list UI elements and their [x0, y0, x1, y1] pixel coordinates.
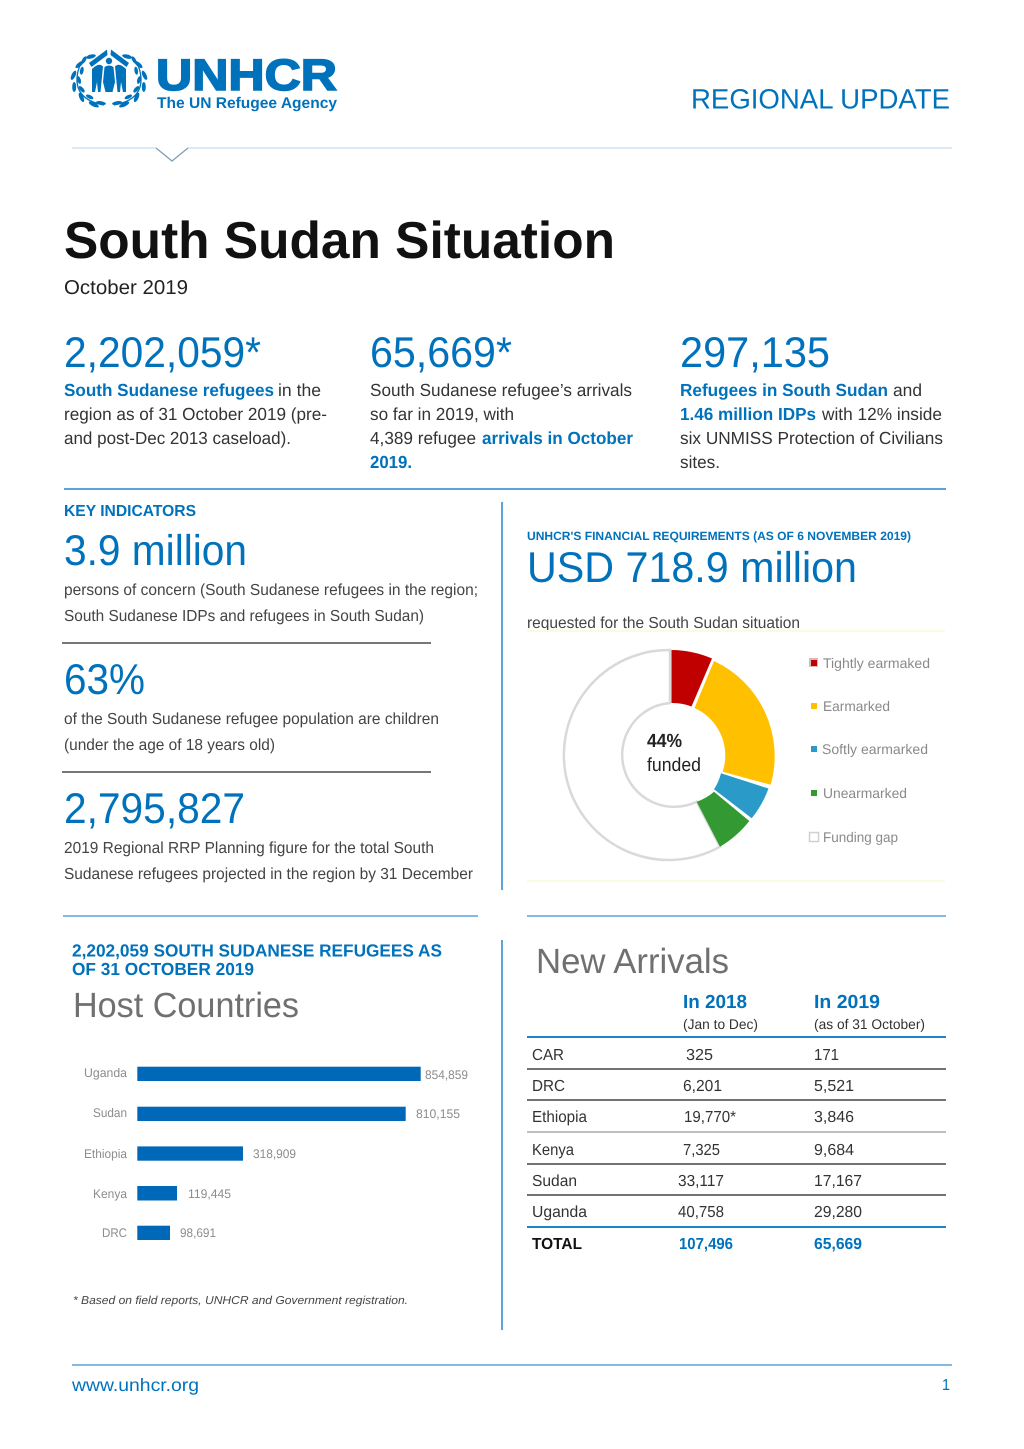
heading: host countries: Host Countries — [73, 986, 299, 1025]
table row: DRC: DRC — [532, 1078, 565, 1095]
chart legend — [809, 655, 930, 845]
bar chart: 318,909 — [253, 1147, 296, 1161]
footer: website: www.unhcr.org — [71, 1375, 199, 1395]
table row: total — [532, 1236, 862, 1253]
panel: financial requirements — [527, 529, 945, 881]
table row: total: 65,669 — [814, 1236, 862, 1253]
bar chart: Sudan — [93, 1106, 127, 1120]
panel subheading: 2,202,059 SOUTH SUDANESE REFUGEES AS — [72, 940, 442, 960]
stat number: 65,669* — [370, 329, 512, 377]
icon: UNHCR emblem — [70, 50, 148, 109]
table row: Uganda — [532, 1204, 862, 1221]
table row: Kenya: Kenya — [532, 1142, 574, 1159]
stat description: region as of 31 October 2019 (pre- — [64, 404, 327, 424]
bar chart: Kenya — [93, 1187, 127, 1201]
donut center label: funded — [647, 755, 701, 776]
table row: Sudan: Sudan — [532, 1173, 577, 1190]
chart legend: Funding gap — [823, 829, 898, 845]
stat description: and — [893, 380, 922, 400]
stat description — [680, 380, 943, 472]
table row: Kenya: 9,684 — [814, 1142, 854, 1159]
table row: DRC: 5,521 — [814, 1078, 854, 1095]
stat description — [370, 380, 633, 472]
table row: total: 107,496 — [679, 1236, 733, 1253]
panel: host countries — [72, 940, 468, 1307]
table header: In 2018 — [683, 992, 747, 1013]
indicator: children share: (under the age of 18 years old) — [64, 737, 275, 754]
stat description: 2019. — [370, 452, 412, 472]
panel subheading: OF 31 OCTOBER 2019 — [72, 959, 254, 979]
table row: Uganda: 29,280 — [814, 1204, 862, 1221]
header rule with chevron — [72, 148, 952, 161]
indicator: children share: of the South Sudanese refugee population are children — [64, 711, 439, 728]
stat description: Refugees in South Sudan — [680, 380, 888, 400]
stat description: South Sudanese refugees — [64, 380, 274, 400]
table header — [683, 992, 925, 1032]
subtitle: date: October 2019 — [64, 277, 188, 299]
stat description: so far in 2019, with — [370, 404, 514, 424]
panel subheading — [72, 940, 442, 979]
indicator: planning figure: 2019 Regional RRP Planning figure for the total South — [64, 840, 434, 857]
panel: new arrivals — [527, 942, 946, 1253]
table row: Kenya — [532, 1142, 854, 1159]
header: UNHCR logo — [70, 50, 337, 112]
stat description: 4,389 refugee — [370, 428, 476, 448]
bar chart — [84, 1066, 468, 1240]
footnote: * Based on field reports, UNHCR and Government registration. — [73, 1295, 408, 1307]
funding caption: requested for the South Sudan situation — [527, 615, 800, 632]
table row: Sudan: 33,117 — [678, 1173, 724, 1190]
table row: Kenya: 7,325 — [683, 1142, 720, 1159]
table row: Ethiopia: Ethiopia — [532, 1109, 587, 1126]
table row: Ethiopia: 19,770* — [684, 1109, 736, 1126]
stat number: 297,135 — [680, 329, 830, 377]
table row: DRC: 6,201 — [683, 1078, 722, 1095]
table row: Uganda: 40,758 — [678, 1204, 724, 1221]
bar chart: 854,859 — [425, 1068, 468, 1082]
chart legend: Tightly earmaked — [823, 655, 930, 671]
bar chart: 119,445 — [188, 1187, 231, 1201]
stat description: in the — [278, 380, 321, 400]
indicator: planning figure — [64, 785, 474, 883]
bar chart: 98,691 — [180, 1226, 216, 1240]
chart legend: Earmarked — [823, 698, 890, 714]
stat description: South Sudanese refugee’s arrivals — [370, 380, 632, 400]
stat description: six UNMISS Protection of Civilians — [680, 428, 943, 448]
table row: Sudan — [532, 1173, 862, 1190]
table row: CAR: 171 — [814, 1047, 839, 1064]
stat number: 2,202,059* — [64, 329, 261, 377]
table header: In 2019 — [814, 992, 880, 1013]
indicator: persons of concern: 3.9 million — [64, 527, 247, 575]
bar chart: Ethiopia — [84, 1147, 127, 1161]
donut center label — [647, 731, 701, 776]
chart legend: Softly earmarked — [822, 741, 928, 757]
table row: CAR: CAR — [532, 1047, 564, 1064]
stat description: 1.46 million IDPs — [680, 404, 816, 424]
stat: refugees in South Sudan and IDPs — [680, 329, 943, 472]
bar chart: DRC — [102, 1226, 127, 1240]
table row: Uganda: Uganda — [532, 1204, 587, 1221]
table header: (as of 31 October) — [814, 1016, 925, 1032]
indicator: persons of concern: South Sudanese IDPs and refugees in South Sudan) — [64, 608, 424, 625]
table header: (Jan to Dec) — [683, 1016, 758, 1032]
table row: Sudan: 17,167 — [814, 1173, 862, 1190]
bar chart: 810,155 — [416, 1107, 460, 1121]
indicator: planning figure: Sudanese refugees projected in the region by 31 December — [64, 866, 474, 883]
indicator: children share: 63% — [64, 656, 145, 704]
heading: financial requirements: UNHCR'S FINANCIAL REQUIREMENTS (AS OF 6 NOVEMBER 2019) — [527, 529, 911, 543]
stat description — [64, 380, 327, 448]
stat description: arrivals in October — [482, 428, 633, 448]
footer: page number: 1 — [942, 1377, 950, 1394]
table row: Ethiopia — [532, 1109, 854, 1126]
bar chart: Uganda — [84, 1066, 127, 1080]
stat description: and post-Dec 2013 caseload). — [64, 428, 291, 448]
logo tagline: The UN Refugee Agency — [157, 95, 337, 112]
donut center label: 44% — [647, 731, 682, 752]
table row: total: TOTAL — [532, 1236, 582, 1253]
heading: new arrivals: New Arrivals — [536, 942, 729, 981]
table — [527, 992, 946, 1253]
chart legend: Unearmarked — [823, 785, 907, 801]
indicator: children share — [64, 656, 439, 754]
logo wordmark: UNHCR — [156, 51, 337, 100]
funding amount: USD 718.9 million — [527, 544, 857, 592]
header label: regional update: REGIONAL UPDATE — [691, 84, 950, 114]
stat: arrivals in 2019 — [370, 329, 633, 472]
table row: DRC — [532, 1078, 854, 1095]
panel: key indicators — [62, 503, 478, 883]
stat: refugees in the region — [64, 329, 327, 448]
indicator: persons of concern: persons of concern (South Sudanese refugees in the region; — [64, 582, 478, 599]
stat description: with 12% inside — [821, 404, 942, 424]
heading: key indicators: KEY INDICATORS — [64, 503, 196, 520]
indicator: planning figure: 2,795,827 — [64, 785, 245, 833]
title: South Sudan Situation — [64, 212, 615, 270]
table row: Ethiopia: 3,846 — [814, 1109, 854, 1126]
donut chart — [564, 650, 775, 860]
table row: CAR: 325 — [686, 1047, 713, 1064]
indicator: persons of concern — [64, 527, 478, 625]
table row: CAR — [532, 1047, 839, 1064]
stat description: sites. — [680, 452, 720, 472]
